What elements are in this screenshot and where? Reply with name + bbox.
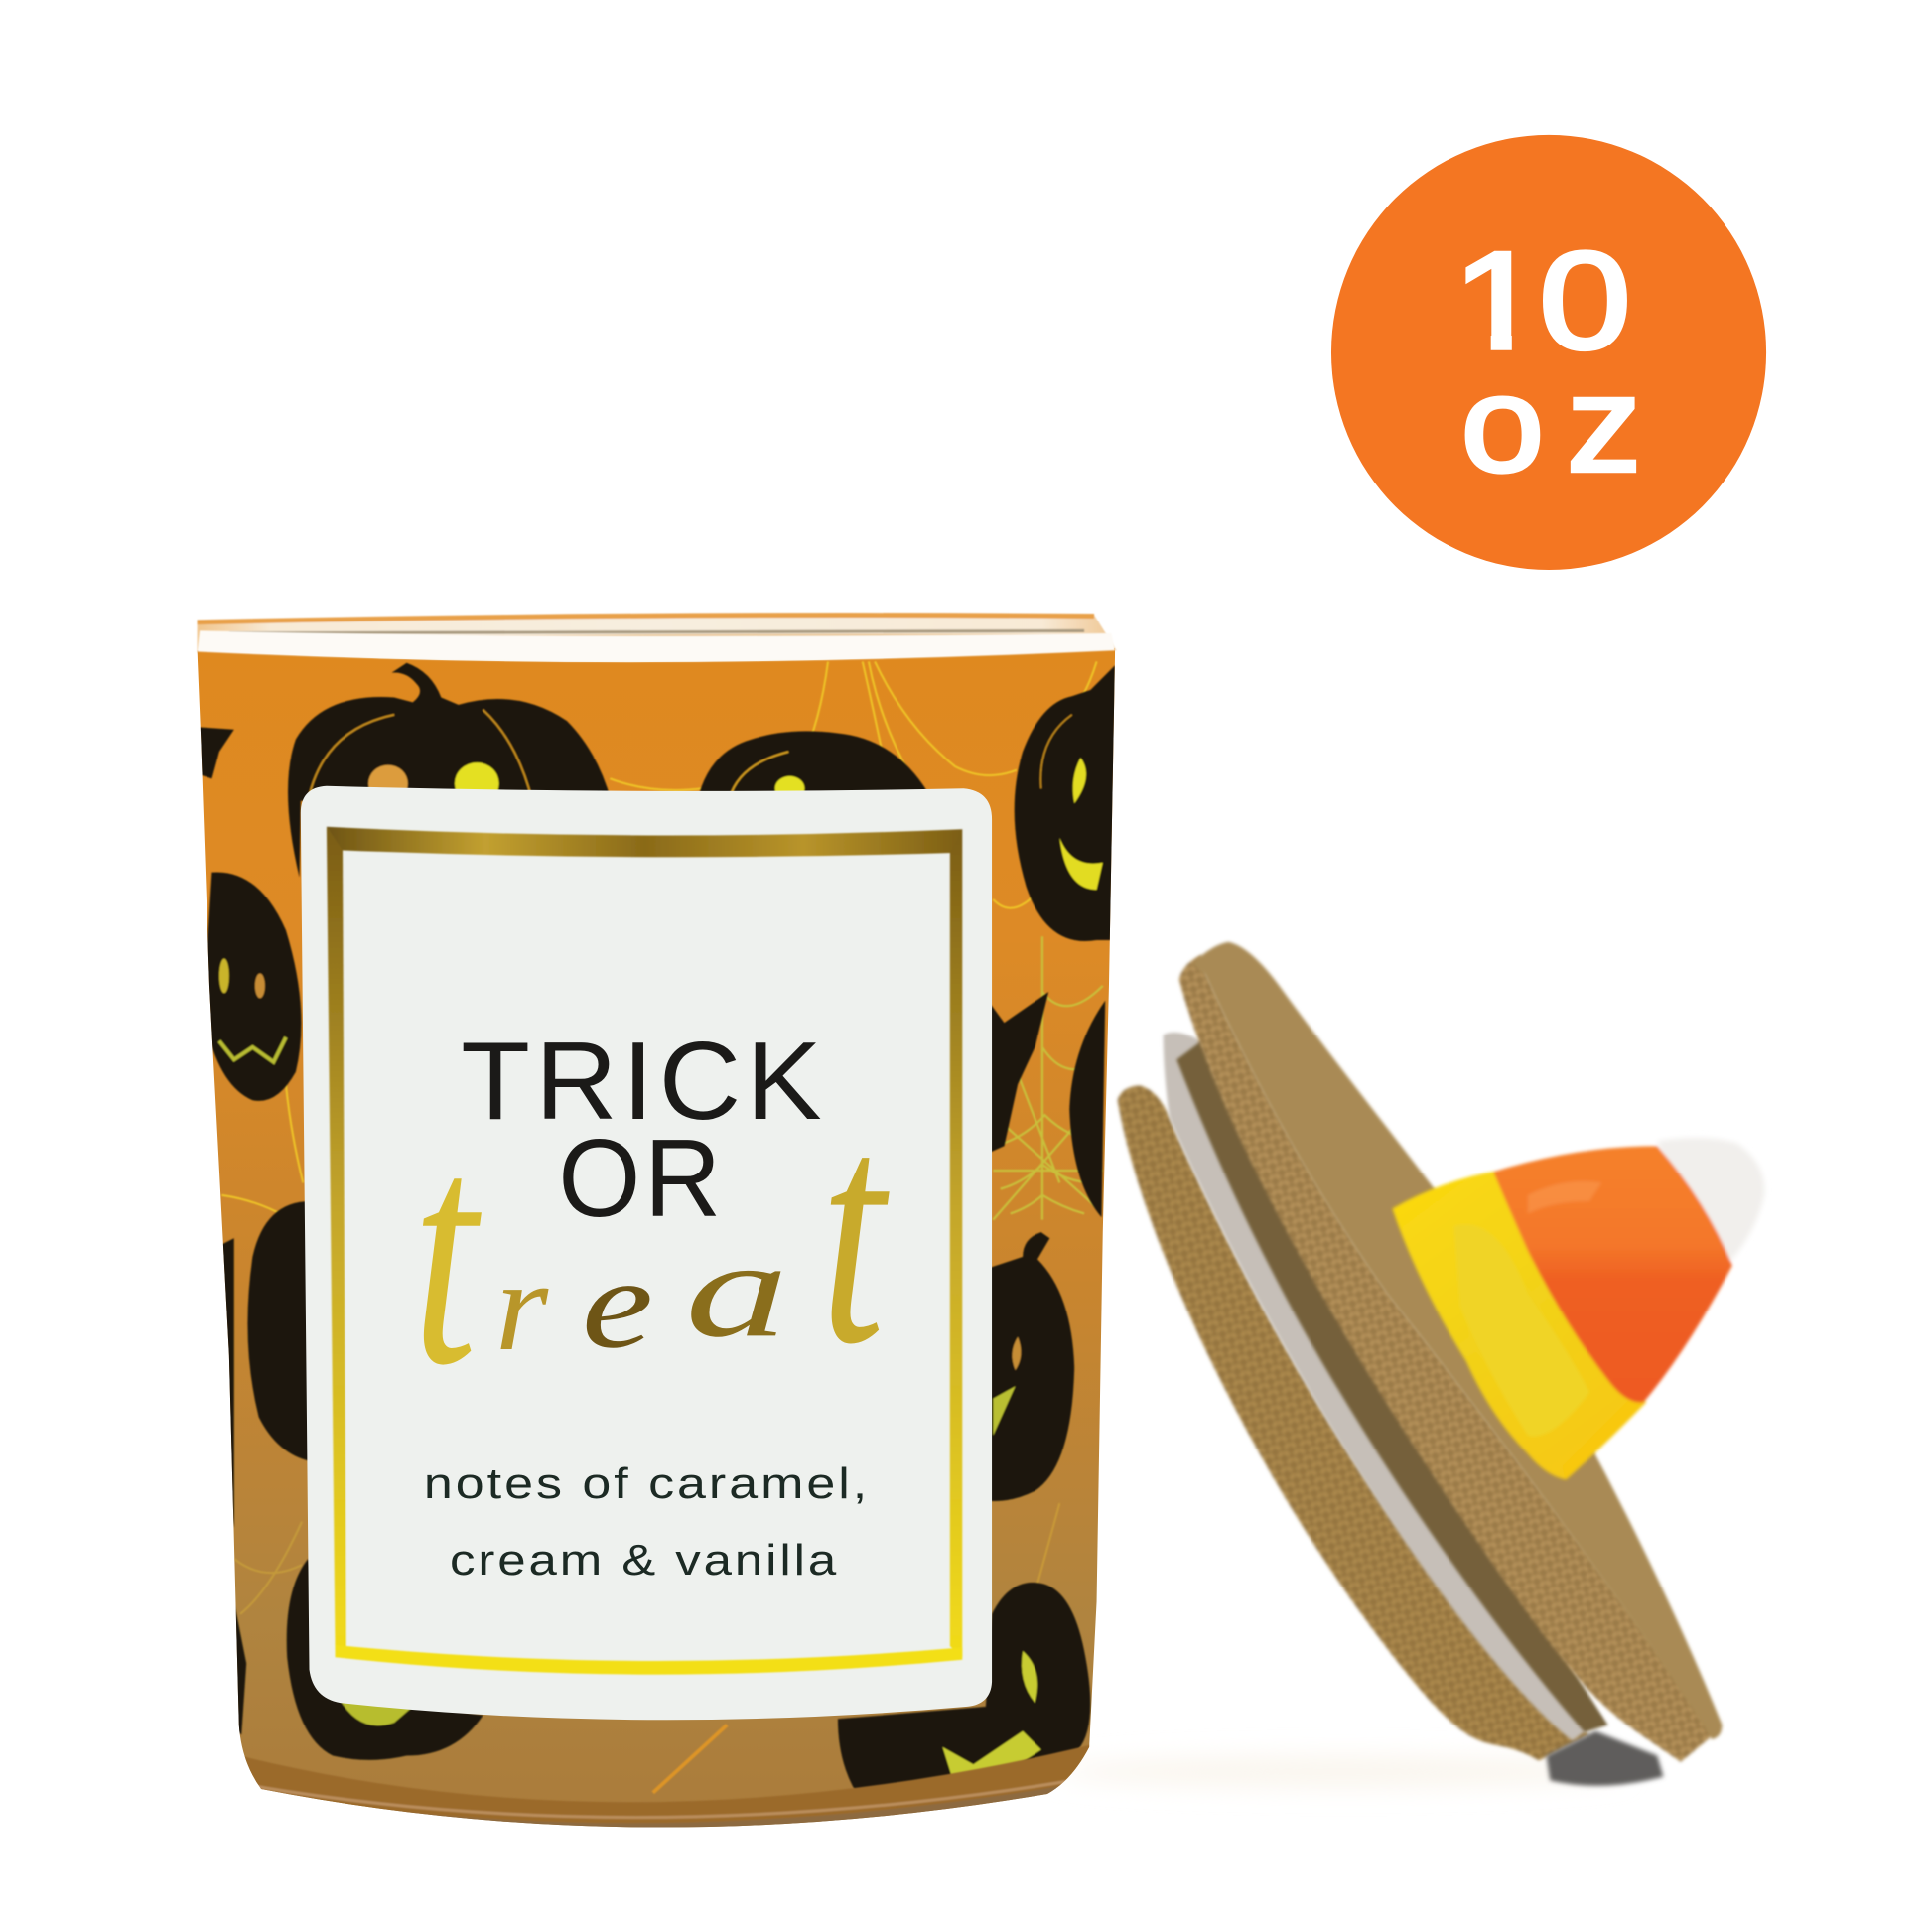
pumpkin left lower <box>247 1201 311 1461</box>
upper plate dotted side <box>1179 955 1717 1762</box>
web cluster right <box>993 936 1103 1220</box>
candy tip <box>1657 1138 1764 1262</box>
script word: treat: e <box>582 1232 653 1375</box>
badge unit: o <box>1461 348 1544 500</box>
pumpkin top right <box>1015 665 1115 941</box>
pumpkin bottom right <box>838 1583 1090 1794</box>
candy corn <box>1392 1138 1764 1480</box>
glass rim <box>198 614 1116 665</box>
pumpkin left <box>204 872 301 1101</box>
line one: notes of caramel, <box>424 1460 870 1508</box>
badge unit: z <box>1567 348 1641 500</box>
badge number: 1 <box>1452 223 1545 377</box>
glass base <box>244 1744 1090 1827</box>
script word: treat: r <box>495 1234 549 1377</box>
size badge <box>1331 135 1766 570</box>
pumpkin right lower <box>986 1232 1074 1501</box>
script word: treat: t <box>821 1052 893 1412</box>
foot trim on numeral <box>1456 333 1544 357</box>
candy orange band <box>1493 1146 1732 1403</box>
heading: trick: TRICK <box>461 1019 827 1143</box>
script word: treat <box>413 1052 893 1433</box>
foot seal <box>1547 1731 1663 1786</box>
candle jar <box>185 614 1134 1872</box>
label panel <box>301 786 992 1720</box>
script word: treat: a <box>685 1213 788 1366</box>
upper plate top surface <box>1195 944 1721 1737</box>
script word: treat: t <box>413 1073 484 1433</box>
pumpkin top middle <box>699 730 927 791</box>
spider web lines <box>221 661 1097 1793</box>
lower bamboo plate <box>1118 1085 1589 1760</box>
pumpkin bottom left <box>287 1559 483 1760</box>
pumpkin top large <box>288 663 612 878</box>
grey gasket <box>1164 1033 1601 1741</box>
heading: or: OR <box>558 1116 725 1240</box>
gold frame <box>327 827 962 1675</box>
jar body with printed wrap <box>185 640 1134 1872</box>
badge number: 0 <box>1539 223 1631 377</box>
line two: cream & vanilla <box>450 1537 839 1585</box>
candy yellow base <box>1392 1171 1646 1480</box>
pumpkin artwork <box>198 663 1115 1794</box>
floor shadow <box>1059 1757 1626 1787</box>
recessed band <box>1176 1041 1608 1732</box>
pumpkin right edge <box>1069 1001 1105 1217</box>
white glass band <box>198 630 1115 662</box>
scent notes text <box>424 1460 870 1585</box>
bats and dark strips <box>198 727 234 778</box>
bamboo lid with candy corn knob <box>1118 944 1764 1786</box>
